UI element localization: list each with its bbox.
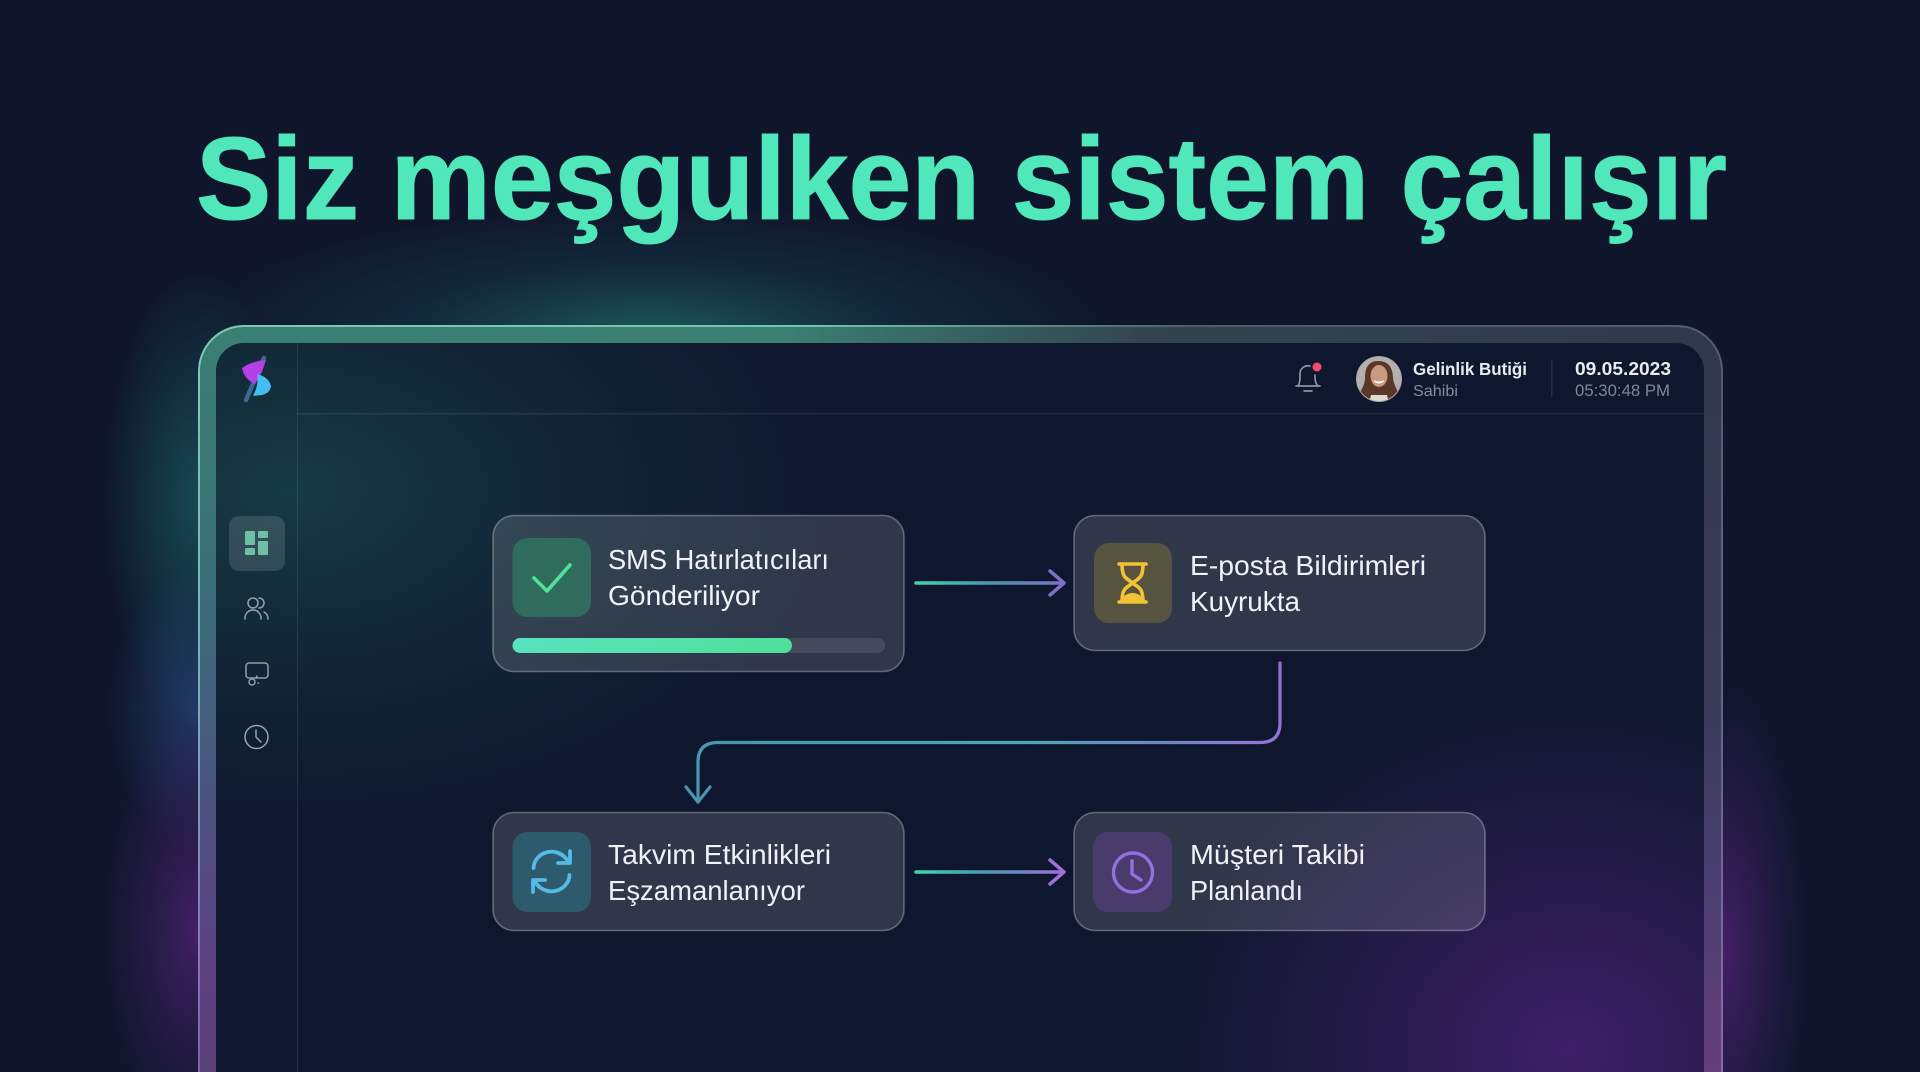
header: date and time: 05:30:48 PM [1575,382,1670,400]
device frame [198,325,1723,1072]
icon: clock [1093,832,1172,912]
icon: hourglass [1094,543,1172,623]
label: Takvim Etkinlikleri [608,839,831,870]
icon: check [512,538,591,617]
label: Müşteri Takibi [1190,839,1365,870]
label [608,839,831,906]
nav item: clock [245,726,268,748]
label: SMS Hatırlatıcıları [608,544,829,575]
header: date and time: 09.05.2023 [1575,359,1671,379]
title: Siz meşgulken sistem çalışır [196,113,1727,244]
progress bar [512,638,885,653]
label: E-posta Bildirimleri [1190,550,1426,581]
card: e-mail [1074,516,1485,650]
header: date and time [1575,359,1671,400]
header: user info [1413,359,1527,400]
arrow: calendar to follow-up [916,860,1064,884]
label [608,544,829,611]
label [1190,839,1365,906]
arrow: SMS to e-mail [916,571,1064,595]
nav item: dashboard [229,516,285,571]
arrow: e-mail to calendar [686,663,1280,802]
label: Gönderiliyor [608,580,760,611]
card: SMS [493,516,904,672]
card: follow-up [1074,812,1485,930]
label [1190,550,1426,617]
nav item: users [245,598,268,619]
card: calendar [493,812,904,930]
header: user info: Gelinlik Butiği [1413,359,1527,379]
label: Kuyrukta [1190,586,1301,617]
app panel [216,343,1704,1072]
icon: sync [512,832,591,912]
label: Eşzamanlanıyor [608,875,805,906]
label: Planlandı [1190,875,1303,906]
header: avatar [1355,355,1403,403]
nav item: monitor [246,663,268,685]
sidebar [229,516,285,748]
header: notifications bell [1296,362,1322,391]
header: user info: Sahibi [1413,383,1458,400]
logo [242,358,271,400]
